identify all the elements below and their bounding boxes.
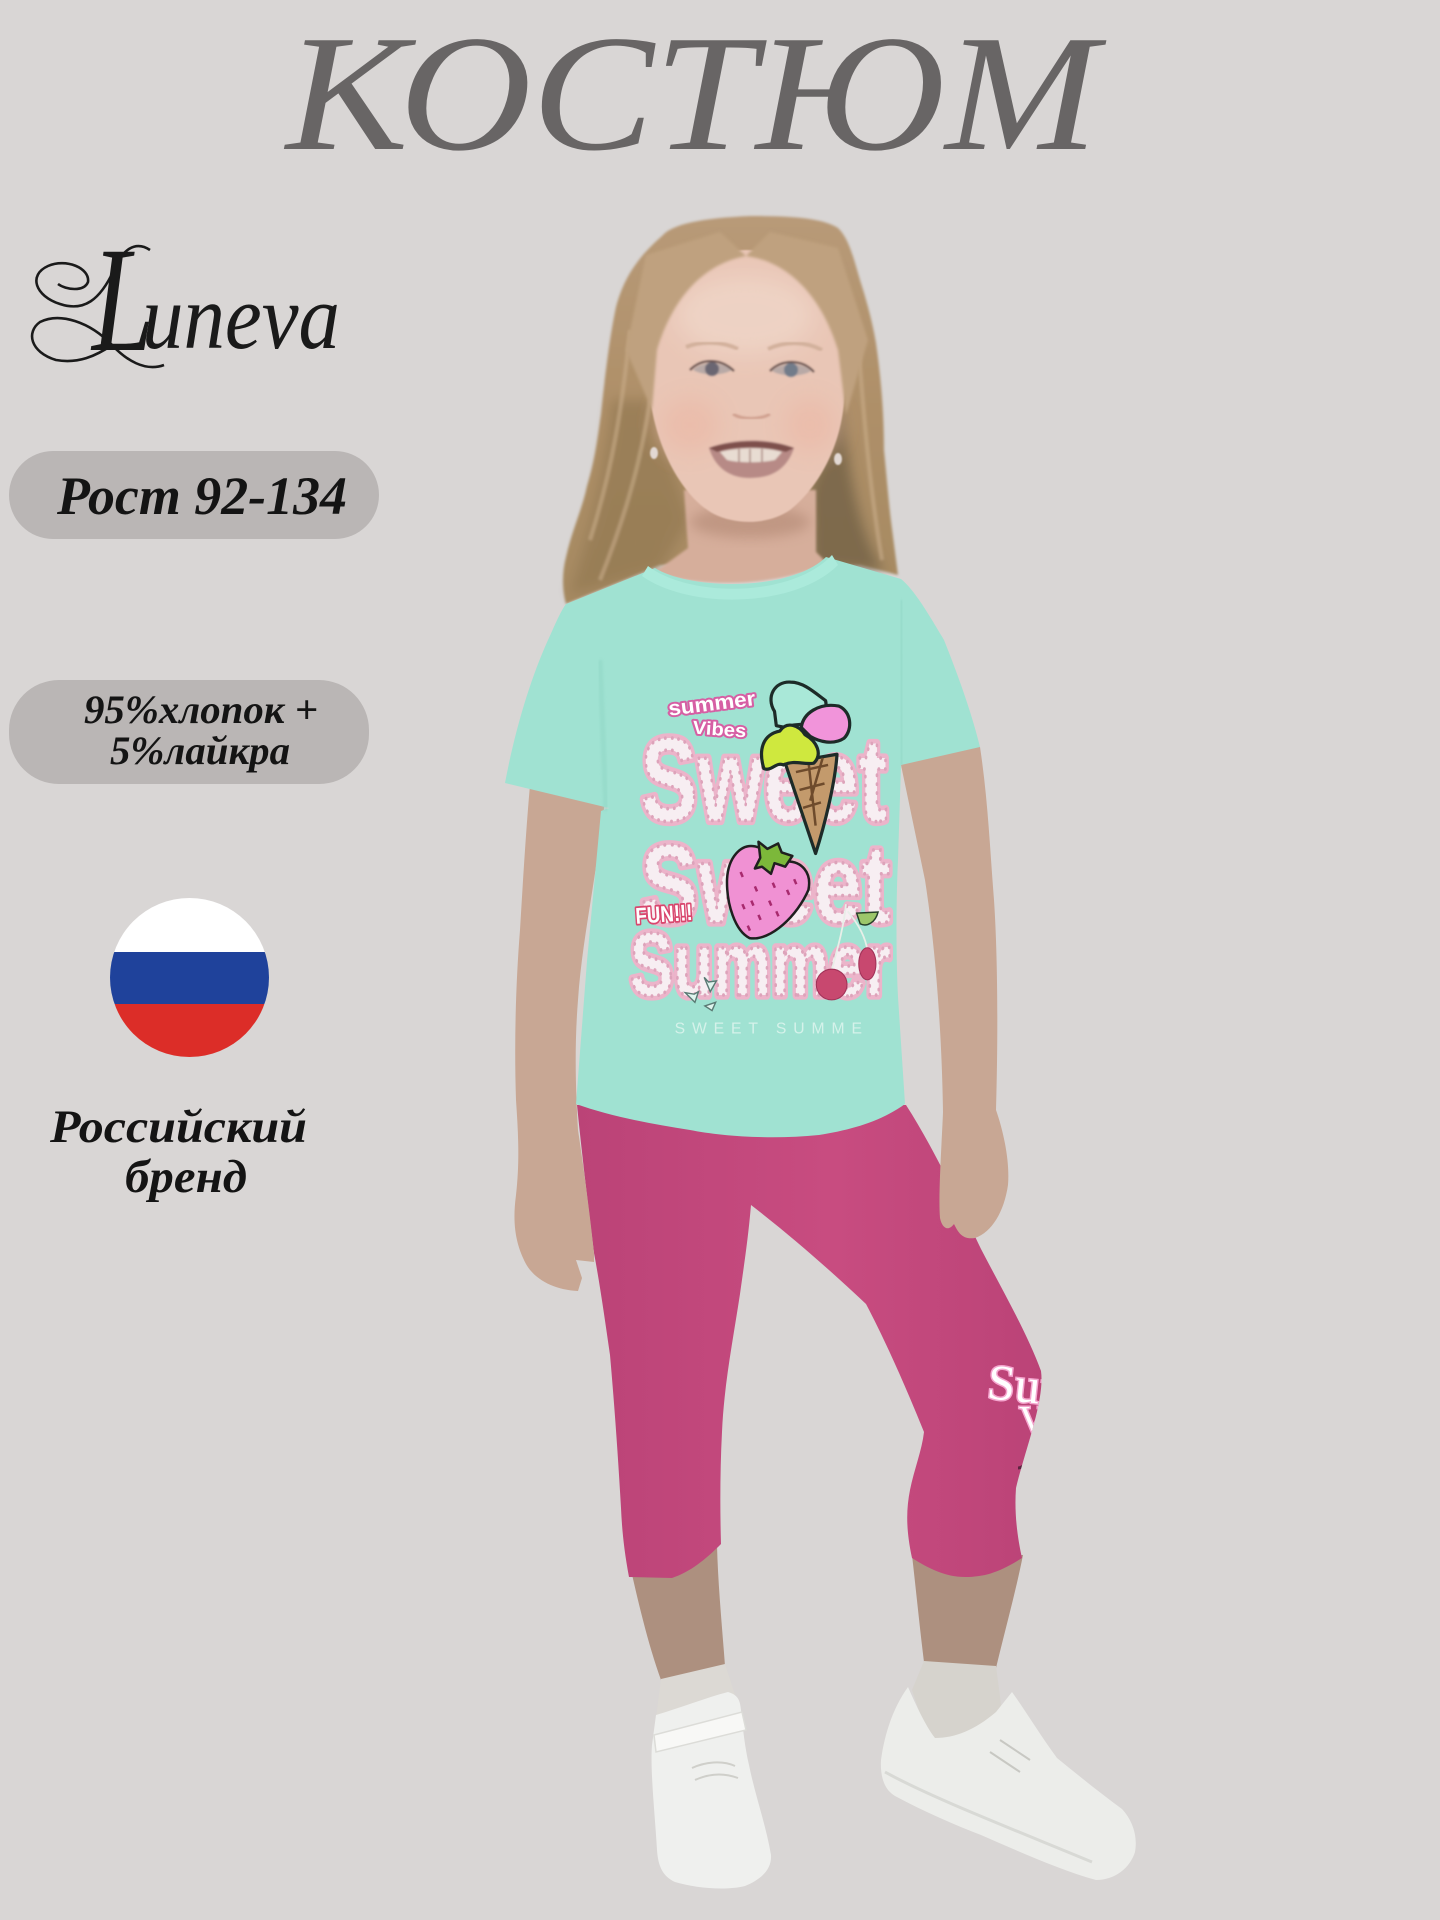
print: summer vibes: Vibes bbox=[692, 717, 747, 741]
print: sweet sweet summer lettering: Sweet bbox=[641, 713, 887, 845]
leggings bbox=[577, 1105, 1042, 1578]
brand logo bbox=[32, 217, 340, 383]
earrings bbox=[650, 447, 658, 459]
lower legs bbox=[631, 1545, 725, 1680]
hairline over forehead bbox=[626, 232, 746, 410]
print: sweet sweet summer lettering: Summer bbox=[630, 914, 891, 1014]
russian brand caption: бренд bbox=[125, 1151, 247, 1203]
print: sweet sweet summer lettering bbox=[630, 713, 891, 1014]
right arm and hand bbox=[901, 745, 1008, 1238]
neck bbox=[655, 490, 826, 583]
print: strawberry bbox=[727, 842, 809, 938]
leggings print bbox=[988, 1365, 1042, 1470]
child model bbox=[505, 216, 1160, 1889]
hair bbox=[563, 216, 898, 604]
print: cherries bbox=[816, 904, 878, 1000]
nose bbox=[733, 414, 770, 418]
print: summer vibes: summer bbox=[667, 687, 757, 721]
print: summer vibes bbox=[667, 687, 757, 741]
print: strawberry seeds bbox=[741, 872, 796, 931]
leggings print: Summer bbox=[985, 1353, 1160, 1427]
print: sweet summer caption: SWEET SUMME bbox=[675, 1020, 867, 1037]
fabric pill: 5%лайкра bbox=[110, 728, 290, 773]
print: hearts bbox=[685, 977, 716, 1011]
brand logo: L bbox=[91, 217, 154, 383]
mouth bbox=[709, 440, 794, 478]
fabric pill: 95%хлопок + bbox=[84, 687, 318, 732]
brand logo: uneva bbox=[142, 266, 340, 368]
neck shadow bbox=[690, 506, 810, 538]
left shoe bbox=[652, 1692, 771, 1889]
left arm and hand bbox=[514, 785, 605, 1291]
print: sweet sweet summer lettering: Sweet bbox=[641, 713, 887, 845]
print: fun: FUN!!! bbox=[635, 899, 693, 929]
title: КОСТЮМ bbox=[284, 1, 1107, 185]
eyes bbox=[690, 361, 814, 377]
leggings print: Vibes bbox=[1019, 1399, 1105, 1441]
shirt print bbox=[630, 682, 891, 1037]
icon: russian flag bbox=[110, 898, 270, 1058]
print: sweet sweet summer lettering: Sweet bbox=[641, 823, 891, 946]
right shoe bbox=[881, 1687, 1136, 1880]
brows bbox=[686, 343, 738, 349]
size pill: Рост 92-134 bbox=[56, 466, 347, 526]
print: sweet sweet summer lettering: Summer bbox=[630, 914, 891, 1014]
print: sweet sweet summer lettering: Sweet bbox=[641, 823, 891, 946]
left sock bbox=[656, 1664, 736, 1718]
right sock bbox=[912, 1661, 1002, 1740]
russian brand caption: Российский bbox=[49, 1101, 307, 1153]
fabric pill bbox=[9, 680, 369, 784]
face bbox=[626, 232, 868, 522]
size pill bbox=[9, 451, 379, 539]
print: ice cream bbox=[762, 682, 850, 853]
russian brand caption bbox=[49, 1101, 307, 1203]
t-shirt bbox=[505, 555, 980, 1137]
